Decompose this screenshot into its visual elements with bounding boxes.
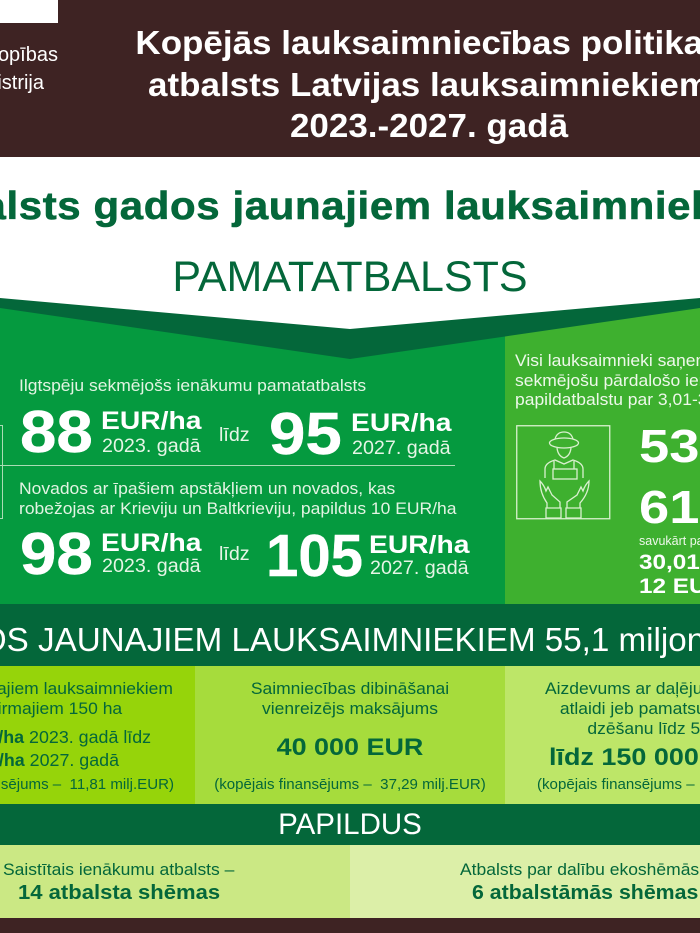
value: 98 EUR/ha 2023: 2023. gadā	[102, 556, 201, 577]
value: 95 EUR/ha 2027	[269, 401, 452, 467]
title: 2023.-2027. gadā	[290, 107, 568, 144]
text: until second: līdz	[219, 544, 250, 565]
value: 105 EUR/ha 2027: 2027. gadā	[370, 558, 469, 579]
value: 105 EUR/ha 2027	[266, 523, 470, 589]
value: 98 EUR/ha 2023: 98	[20, 521, 93, 587]
value: 98 EUR/ha 2023: EUR/ha	[101, 529, 201, 557]
value: 14 schemes: 14 atbalsta shēmas	[18, 881, 220, 904]
text: establishment financing: (kopējais finansējums – 37,29 milj.EUR)	[214, 777, 486, 793]
band: additionally	[0, 804, 700, 845]
text: loan description	[545, 680, 700, 738]
value: 105 EUR/ha 2027: EUR/ha	[369, 531, 469, 559]
value: 88 EUR/ha 2023: 2023. gadā	[102, 436, 201, 457]
value: 95 EUR/ha 2027: EUR/ha	[351, 409, 451, 437]
value: 88 EUR/ha 2023	[20, 399, 202, 465]
title	[135, 24, 700, 144]
text: base support label: Ilgtspēju sekmējošs ienākumu pamatatbalsts	[19, 377, 366, 395]
panel: coupled income support	[0, 845, 350, 918]
band: young farmers heading	[0, 604, 700, 666]
text: coupled support label: Saistītais ienākumu atbalsts –	[3, 861, 234, 879]
icon box: left clipped	[0, 425, 3, 519]
divider line	[0, 465, 455, 466]
value: 98 EUR/ha 2023	[20, 521, 202, 587]
text: special areas: robežojas ar Krieviju un Baltkrieviju, papildus 10 EUR/ha	[19, 500, 456, 518]
value: 88 EUR/ha 2023: EUR/ha	[101, 407, 201, 435]
value: 88 EUR/ha 2023: 88	[20, 399, 93, 465]
text: until: līdz	[219, 425, 250, 446]
footer band	[0, 918, 700, 933]
logo white box	[0, 0, 58, 23]
panel: income base support	[0, 377, 470, 589]
value: 30,01 range	[639, 550, 700, 598]
panel: area payment	[0, 666, 195, 804]
chevron background	[0, 298, 700, 604]
value: 95 EUR/ha 2027: 2027. gadā	[352, 438, 451, 459]
title: atbalsts Latvijas lauksaimniekiem	[148, 66, 700, 102]
logo block	[0, 0, 58, 94]
text: special areas: Novados ar īpašiem apstākļiem un novados, kas	[19, 480, 395, 498]
text: area payment description	[0, 680, 173, 718]
icon: farmer with hands	[516, 425, 610, 520]
value: 95 EUR/ha 2027: 95	[269, 401, 342, 467]
text: establishment description	[251, 680, 449, 718]
text: establishment description: Saimniecības dibināšanai	[251, 680, 449, 698]
value: 105 EUR/ha 2027: 105	[266, 523, 363, 589]
value: 40 000 EUR: 40 000 EUR	[277, 734, 423, 761]
text: additionally heading: PAPILDUS	[278, 808, 422, 841]
panel: loan	[505, 666, 700, 804]
text: special areas	[19, 480, 456, 518]
text: establishment description: vienreizējs maksājums	[262, 700, 438, 718]
value: 6 schemes: 6 atbalstāmās shēmas	[472, 881, 698, 904]
header band	[0, 0, 700, 157]
panel: redistributive support	[515, 352, 700, 598]
panel: establishment payment	[195, 666, 505, 804]
section heading: pamatatbalsts: PAMATATBALSTS	[172, 253, 528, 301]
text: redistributive intro	[515, 352, 700, 409]
panel: eco-schemes	[350, 845, 700, 918]
